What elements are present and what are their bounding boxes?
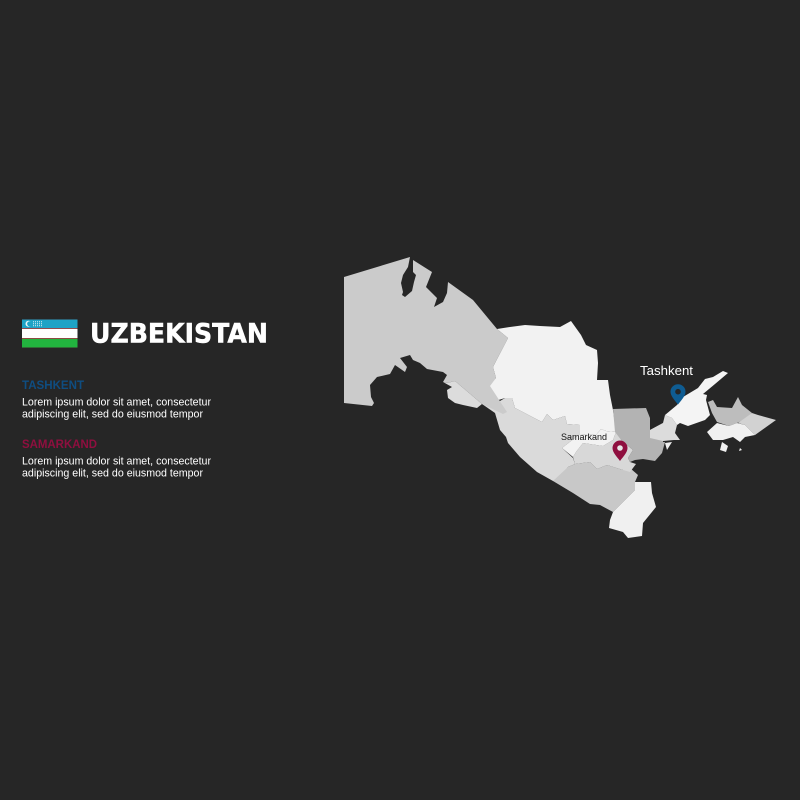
region: Karakalpakstan <box>344 257 508 414</box>
title: UZBEKISTAN <box>90 318 268 350</box>
exclaves <box>665 442 742 452</box>
flag of Uzbekistan <box>22 319 78 348</box>
map of Uzbekistan <box>344 257 776 538</box>
region: Navoi <box>488 321 616 435</box>
text block: Samarkand: SAMARKAND <box>22 437 97 451</box>
text block: Samarkand <box>22 437 211 480</box>
icon: Tashkent pin <box>670 384 686 404</box>
region: Andijan <box>738 413 776 435</box>
region: Syrdarya <box>650 415 680 441</box>
label: Samarkand: Samarkand <box>561 432 607 443</box>
region: Samarkand west <box>562 429 616 457</box>
region: Tashkent province <box>665 371 728 426</box>
icon: Samarkand pin <box>612 440 628 461</box>
region: Jizzakh <box>613 408 665 462</box>
region: Samarkand <box>573 432 636 472</box>
text block: Tashkent <box>22 378 211 420</box>
text block: Samarkand: adipiscing elit, sed do eiusmod tempor <box>22 468 203 480</box>
text block: Tashkent: Lorem ipsum dolor sit amet, consectetur <box>22 396 211 408</box>
region: Kashkadarya <box>553 462 638 512</box>
region: Fergana <box>707 423 755 442</box>
text block: Samarkand: Lorem ipsum dolor sit amet, consectetur <box>22 456 211 468</box>
text block: Tashkent: TASHKENT <box>22 378 85 392</box>
text block: Tashkent: adipiscing elit, sed do eiusmod tempor <box>22 408 203 420</box>
region: Bukhara <box>482 398 580 481</box>
region: Surkhandarya <box>609 482 656 538</box>
region: Namangan <box>708 397 752 426</box>
label: Tashkent: Tashkent <box>640 363 693 378</box>
region: Khorezm <box>443 381 482 408</box>
